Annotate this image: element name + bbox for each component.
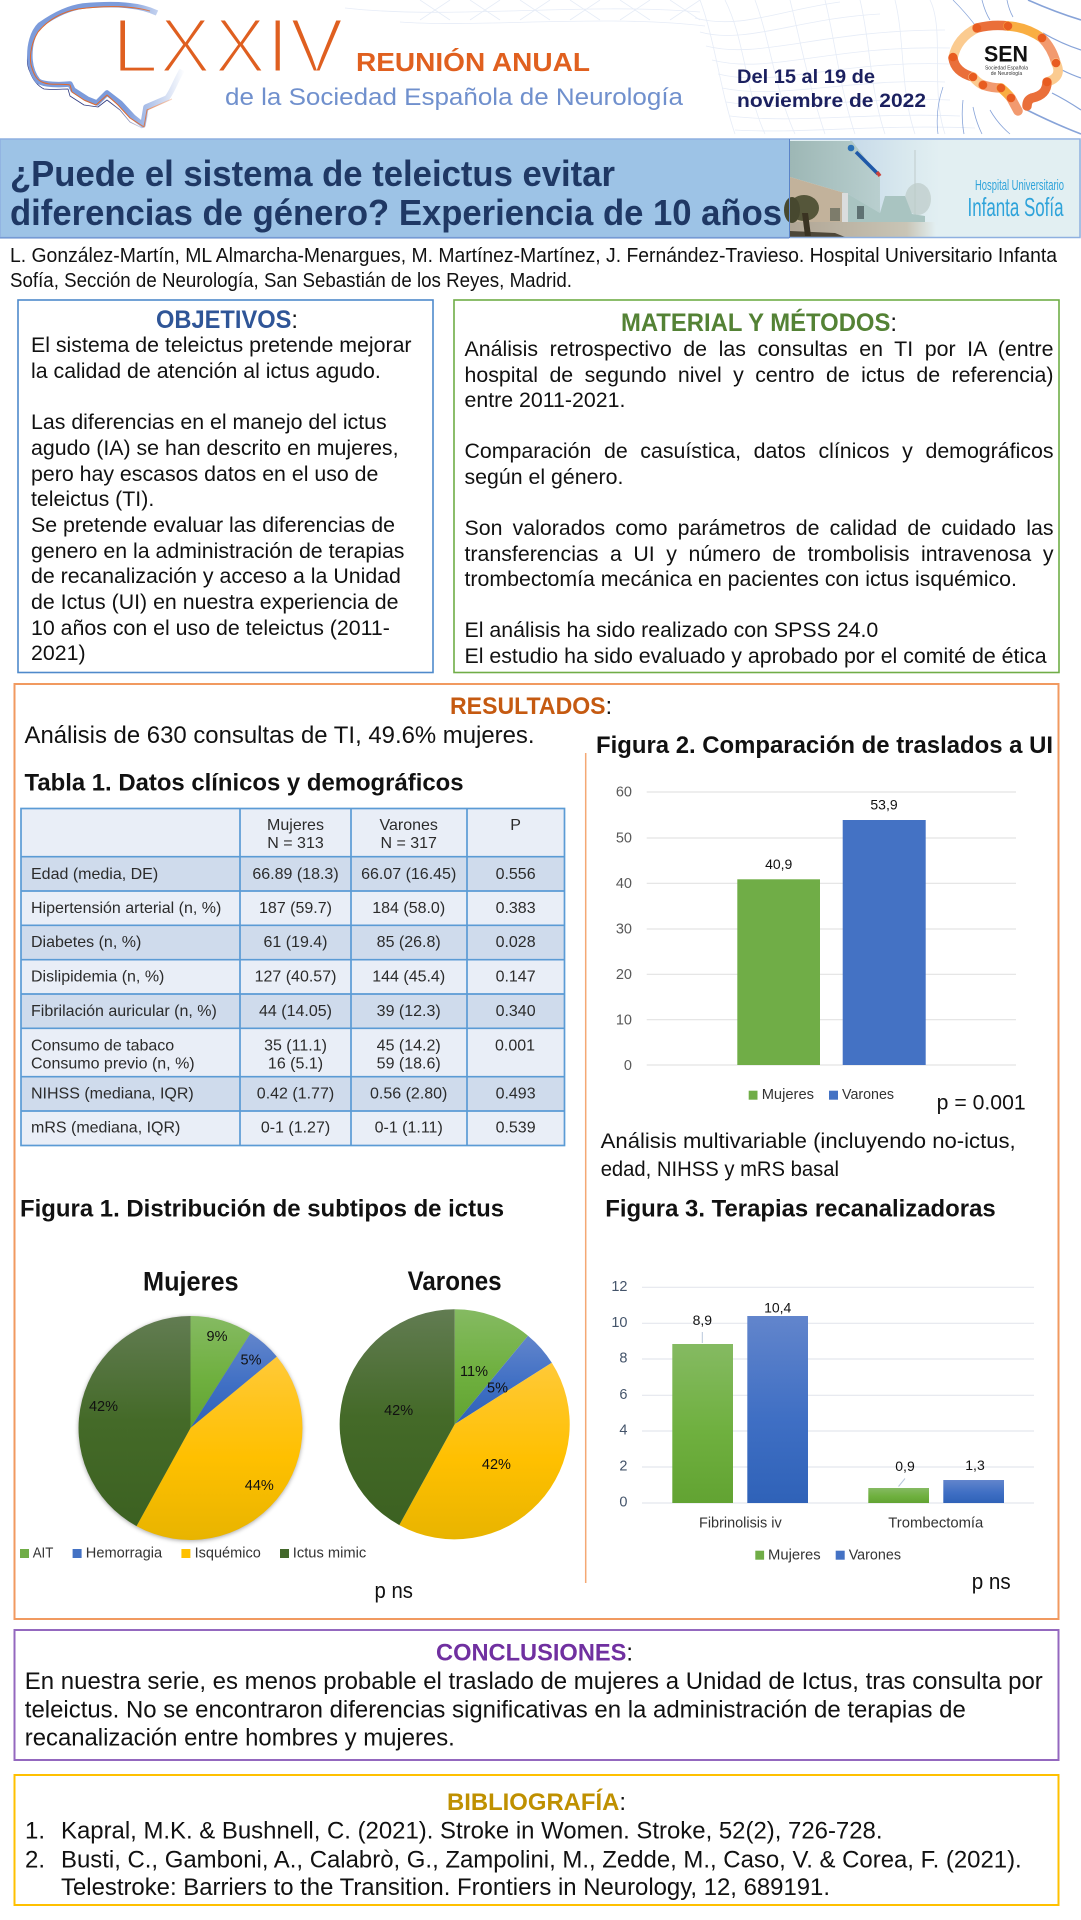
heading: figura 1: Figura 1. Distribución de subtipos de ictus <box>20 1196 504 1223</box>
text: material y métodos: Son valorados como parámetros de calidad de cuidado las <box>464 516 1054 540</box>
header banner <box>26 0 1081 135</box>
table: datos clínicos: 0.556 <box>496 866 536 883</box>
text: objetivos: Las diferencias en el manejo del ictus <box>31 410 387 434</box>
text: objetivos: 10 años con el uso de teleictus (2011- <box>31 616 390 640</box>
authors <box>10 245 1058 292</box>
text: análisis multivariable: Análisis multivariable (incluyendo no-ictus, <box>601 1130 1016 1153</box>
table: datos clínicos: Mujeres <box>267 817 324 834</box>
chart: traslados a UI: 0 <box>624 1058 632 1074</box>
text: material y métodos: según el género. <box>464 465 623 489</box>
text: objetivos: El sistema de teleictus pretende mejorar <box>31 333 412 357</box>
title: LXXIV: L <box>112 2 158 88</box>
text: dates: noviembre de 2022 <box>737 91 926 112</box>
authors: Sofía, Sección de Neurología, San Sebastián de los Reyes, Madrid. <box>10 270 572 292</box>
chart: terapias recanalizadoras: Varones <box>849 1546 901 1563</box>
chart: traslados a UI: 10 <box>616 1012 632 1028</box>
table: datos clínicos: Diabetes (n, %) <box>31 934 141 951</box>
table: datos clínicos: Hipertensión arterial (n, %) <box>31 900 221 917</box>
text: resumen: Análisis de 630 consultas de TI, 49.6% mujeres. <box>24 722 534 749</box>
legend: subtipos: Isquémico <box>195 1545 261 1562</box>
table: datos clínicos: 45 (14.2) <box>377 1038 441 1055</box>
table: datos clínicos: 144 (45.4) <box>372 969 445 986</box>
panel: objetivos: OBJETIVOS: <box>156 306 298 334</box>
chart: terapias recanalizadoras: Trombectomía <box>888 1515 984 1532</box>
text: objetivos: 2021) <box>31 641 86 665</box>
panel: resultados <box>14 683 1060 1620</box>
text: material y métodos: transferencias a UI y número de trombolisis intravenosa y <box>464 542 1054 566</box>
table: datos clínicos: 127 (40.57) <box>255 969 336 986</box>
text: objetivos <box>31 333 412 665</box>
chart: terapias recanalizadoras: 0,9 <box>895 1458 915 1474</box>
table: datos clínicos: 0.028 <box>496 934 536 951</box>
chart: terapias recanalizadoras: 8 <box>619 1350 628 1366</box>
table: datos clínicos: 16 (5.1) <box>268 1056 323 1073</box>
heading: tabla 1: Tabla 1. Datos clínicos y demográficos <box>24 770 464 796</box>
table: datos clínicos: 184 (58.0) <box>372 900 445 917</box>
table: datos clínicos: 0.56 (2.80) <box>370 1086 447 1103</box>
legend: subtipos: AIT <box>33 1545 53 1562</box>
chart: terapias recanalizadoras: 0 <box>619 1494 628 1510</box>
text: material y métodos: entre 2011-2021. <box>464 388 625 412</box>
title: LXXIV <box>112 2 344 89</box>
title text: diferencias de género? Experiencia de 10 años <box>10 192 782 233</box>
chart: pie mujeres: 44% <box>245 1478 274 1494</box>
panel: conclusiones: CONCLUSIONES: <box>436 1640 633 1667</box>
text: material y métodos: Comparación de casuística, datos clínicos y demográficos <box>464 439 1054 463</box>
panel: conclusiones <box>14 1629 1060 1761</box>
table: datos clínicos: 0-1 (1.11) <box>375 1120 443 1137</box>
table: datos clínicos: 0.42 (1.77) <box>257 1086 334 1103</box>
chart: traslados a UI: Varones <box>842 1086 894 1103</box>
text: p ns figura 1: p ns <box>374 1578 413 1603</box>
header banner: de Neurología <box>991 71 1022 77</box>
text: material y métodos: Análisis retrospectivo de las consultas en TI por IA (entre <box>464 337 1054 361</box>
table: datos clínicos: NIHSS (mediana, IQR) <box>31 1086 194 1103</box>
text: material y métodos <box>464 337 1054 668</box>
chart: terapias recanalizadoras: Mujeres <box>768 1546 821 1563</box>
chart: terapias recanalizadoras: 10 <box>611 1315 628 1331</box>
panel: conclusiones: recanalización entre hombres y mujeres. <box>25 1725 455 1752</box>
chart: traslados a UI: 20 <box>616 967 632 983</box>
table: datos clínicos: 35 (11.1) <box>264 1038 327 1055</box>
panel: bibliografía: 1. <box>25 1817 45 1844</box>
title: LXXIV: X <box>214 3 266 89</box>
chart: traslados a UI: 40 <box>616 876 632 892</box>
title text: ¿Puede el sistema de teleictus evitar <box>10 153 615 194</box>
table: datos clínicos: Fibrilación auricular (n, %) <box>31 1003 217 1020</box>
header banner: SEN <box>984 42 1028 66</box>
chart: pie varones: 42% <box>482 1457 511 1473</box>
chart: terapias recanalizadoras: 2 <box>619 1458 628 1474</box>
chart: pie mujeres: 5% <box>241 1352 262 1368</box>
text: p ns figura 3: p ns <box>972 1569 1011 1594</box>
chart: traslados a UI: 60 <box>616 784 632 800</box>
text: material y métodos: El análisis ha sido realizado con SPSS 24.0 <box>464 618 878 642</box>
text: p figura 2: p = 0.001 <box>937 1091 1026 1114</box>
icon: SEN logo <box>953 25 1058 111</box>
panel: objetivos <box>17 299 434 674</box>
table: datos clínicos: 0.340 <box>496 1003 536 1020</box>
legend: subtipos <box>20 1545 367 1562</box>
text: objetivos: la calidad de atención al ictus agudo. <box>31 359 381 383</box>
chart: terapias recanalizadoras: Fibrinolisis iv <box>699 1515 782 1532</box>
chart: pie varones: 11% <box>460 1364 488 1380</box>
title: LXXIV: X <box>160 3 211 89</box>
table: datos clínicos: 0-1 (1.27) <box>261 1120 330 1137</box>
table: datos clínicos: 0.383 <box>496 900 536 917</box>
table: datos clínicos: Dislipidemia (n, %) <box>31 969 164 986</box>
legend: subtipos: Hemorragia <box>86 1545 163 1562</box>
table: datos clínicos: 39 (12.3) <box>377 1003 441 1020</box>
chart: traslados a UI <box>616 784 1016 1103</box>
chart: pie varones: Varones <box>408 1266 502 1296</box>
chart: traslados a UI: 30 <box>616 922 632 938</box>
heading: resultados: RESULTADOS: <box>450 693 612 720</box>
text: objetivos: teleictus (TI). <box>31 487 154 511</box>
chart: pie varones: 42% <box>384 1403 413 1419</box>
chart: pie varones: 5% <box>487 1380 508 1396</box>
panel: bibliografía: Kapral, M.K. & Bushnell, C. (2021). Stroke in Women. Stroke, 52(2), 726-728. <box>61 1817 882 1844</box>
text: análisis multivariable <box>601 1130 1016 1181</box>
panel: material y métodos <box>453 299 1060 674</box>
text: análisis multivariable: edad, NIHSS y mRS basal <box>601 1158 839 1181</box>
table: datos clínicos: Varones <box>379 817 438 834</box>
text: objetivos: de Ictus (UI) en nuestra experiencia de <box>31 590 399 614</box>
panel: bibliografía <box>14 1774 1060 1906</box>
header banner: Sociedad Española <box>985 66 1028 72</box>
text: material y métodos: hospital de segundo nivel y centro de ictus de referencia) <box>464 363 1054 387</box>
table: datos clínicos: 187 (59.7) <box>259 900 332 917</box>
legend: subtipos: Ictus mimic <box>293 1545 367 1562</box>
panel: bibliografía: 2. <box>25 1846 45 1873</box>
hospital photo and logo <box>784 140 1081 237</box>
table: datos clínicos: 44 (14.05) <box>259 1003 332 1020</box>
heading: figura 3: Figura 3. Terapias recanalizadoras <box>605 1196 996 1223</box>
title text <box>10 153 782 233</box>
table: datos clínicos: 0.539 <box>496 1120 536 1137</box>
panel: bibliografía: BIBLIOGRAFÍA: <box>447 1788 626 1816</box>
text: objetivos: Se pretende evaluar las diferencias de <box>31 513 395 537</box>
title band <box>0 138 1081 238</box>
heading: reunión anual: REUNIÓN ANUAL <box>356 47 590 77</box>
chart: terapias recanalizadoras <box>611 1279 1034 1563</box>
chart: traslados a UI: 53,9 <box>870 796 898 812</box>
table: datos clínicos: 0.493 <box>496 1086 536 1103</box>
table: datos clínicos: N = 317 <box>380 835 437 852</box>
text: material y métodos: El estudio ha sido evaluado y aprobado por el comité de ética <box>464 644 1047 668</box>
text: objetivos: agudo (IA) se han descrito en mujeres, <box>31 436 399 460</box>
chart: terapias recanalizadoras: 4 <box>619 1422 628 1438</box>
panel: bibliografía: Busti, C., Gamboni, A., Calabrò, G., Zampolini, M., Zedde, M., Caso, V. & Corea, F. (2021). <box>61 1846 1022 1873</box>
table: datos clínicos: 66.89 (18.3) <box>252 866 339 883</box>
table: datos clínicos: P <box>510 817 521 834</box>
text: objetivos: genero en la administración de terapias <box>31 539 404 563</box>
chart: traslados a UI: 50 <box>616 830 632 846</box>
title: LXXIV: V <box>290 2 344 89</box>
chart: terapias recanalizadoras: 6 <box>619 1387 628 1403</box>
chart: pie varones <box>340 1266 570 1539</box>
text: objetivos: pero hay escasos datos en el uso de <box>31 462 378 486</box>
chart: pie mujeres: 9% <box>207 1329 228 1345</box>
table: datos clínicos: 59 (18.6) <box>377 1056 441 1073</box>
chart: terapias recanalizadoras: 10,4 <box>764 1299 792 1315</box>
icon: brain outline <box>27 5 182 128</box>
panel: conclusiones: teleictus. No se encontraron diferencias significativas en la administración de terapias de <box>25 1697 966 1724</box>
chart: pie mujeres: Mujeres <box>143 1267 239 1297</box>
chart: pie mujeres <box>79 1267 302 1540</box>
panel: conclusiones: En nuestra serie, es menos probable el traslado de mujeres a Unidad de Ictus, tras consulta por <box>25 1668 1043 1695</box>
chart: traslados a UI: 40,9 <box>765 856 793 872</box>
heading: sociedad: de la Sociedad Española de Neurología <box>225 84 684 111</box>
chart: terapias recanalizadoras: 12 <box>611 1279 628 1295</box>
table: datos clínicos: Consumo previo (n, %) <box>31 1056 195 1073</box>
chart: terapias recanalizadoras: 8,9 <box>693 1312 712 1328</box>
table: datos clínicos: 66.07 (16.45) <box>361 866 456 883</box>
authors: L. González-Martín, ML Almarcha-Menargues, M. Martínez-Martínez, J. Fernández-Travieso. Hospital Universitario Infanta <box>10 245 1058 267</box>
table: datos clínicos: Consumo de tabaco <box>31 1038 174 1055</box>
table: datos clínicos: N = 313 <box>267 835 324 852</box>
title: LXXIV: I <box>267 3 288 89</box>
table: datos clínicos: Edad (media, DE) <box>31 866 158 883</box>
chart: traslados a UI: Mujeres <box>762 1086 814 1103</box>
text: dates: Del 15 al 19 de <box>737 67 875 88</box>
table: datos clínicos: 61 (19.4) <box>263 934 328 951</box>
table: datos clínicos: 0.001 <box>495 1038 535 1055</box>
table: datos clínicos: 0.147 <box>496 969 536 986</box>
table: datos clínicos <box>21 808 564 1146</box>
text: dates <box>737 67 926 112</box>
heading: figura 2: Figura 2. Comparación de traslados a UI <box>596 732 1053 759</box>
text: objetivos: de recanalización y acceso a la Unidad <box>31 564 401 588</box>
table: datos clínicos: 85 (26.8) <box>377 934 441 951</box>
panel: material y métodos: MATERIAL Y MÉTODOS: <box>621 308 897 337</box>
chart: pie mujeres: 42% <box>89 1399 118 1415</box>
chart: terapias recanalizadoras: 1,3 <box>965 1457 985 1473</box>
table: datos clínicos: mRS (mediana, IQR) <box>31 1120 180 1137</box>
panel: bibliografía: Telestroke: Barriers to the Transition. Frontiers in Neurology, 12, 689191. <box>61 1874 830 1901</box>
text: material y métodos: trombectomía mecánica en pacientes con ictus isquémico. <box>464 567 1017 591</box>
